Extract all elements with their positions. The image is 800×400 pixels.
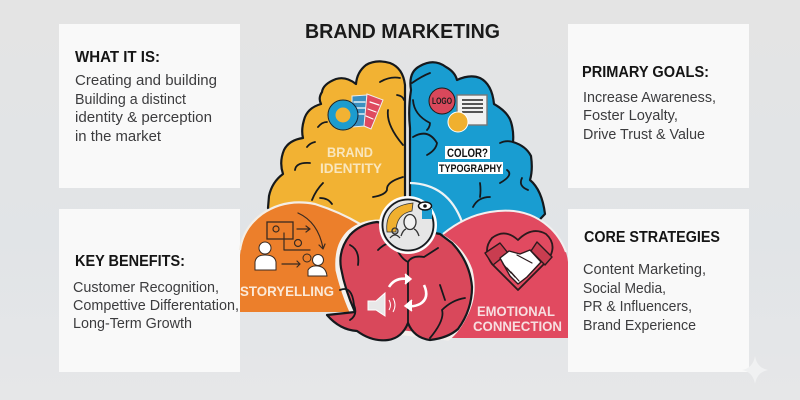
icon: cycle arrows (389, 274, 426, 311)
red brain: storytelling and emotion (327, 222, 472, 340)
icon: logo and document: LOGO (432, 96, 452, 106)
panel: core strategies (568, 209, 749, 372)
panel: key benefits (59, 209, 240, 372)
icon: person (390, 214, 419, 238)
title: BRAND MARKETING (305, 21, 500, 43)
text: core strategies body: Social Media, (583, 280, 666, 297)
icon: yellow orbit (387, 203, 413, 232)
brain folds (295, 78, 404, 204)
heading: core strategies: CORE STRATEGIES (584, 229, 720, 246)
text: key benefits body (73, 279, 239, 332)
label: emotional connection: EMOTIONAL (477, 303, 555, 319)
brain folds (412, 73, 528, 207)
blue brain: colour and typography (409, 62, 545, 250)
heading: primary goals: PRIMARY GOALS: (582, 64, 709, 81)
icon: sparkle watermark (742, 356, 768, 384)
orange panel: storytelling (240, 202, 360, 312)
text: key benefits body: Long-Term Growth (73, 315, 192, 332)
label: emotional connection (473, 303, 562, 334)
label: brand identity: IDENTITY (320, 160, 383, 176)
label: brand identity (320, 144, 383, 176)
panel: what it is (59, 24, 240, 188)
text: what it is body: Creating and building (75, 72, 217, 89)
heading: key benefits: KEY BENEFITS: (75, 253, 185, 270)
text: core strategies body: Content Marketing, (583, 261, 706, 278)
icon: story flow (255, 213, 327, 276)
icon: color wheel and swatches (328, 94, 383, 130)
label: emotional connection: CONNECTION (473, 318, 562, 334)
white arc behind centre circle (410, 183, 462, 222)
panel: primary goals (568, 24, 749, 188)
text: key benefits body: Compettive Differentation, (73, 297, 239, 314)
red panel: emotional connection (443, 211, 568, 338)
icon: heart and handshake (485, 231, 553, 290)
icon: speaker (368, 293, 395, 316)
icon: eye marker (418, 202, 432, 219)
label: brand identity: BRAND (327, 144, 373, 160)
brain folds (340, 243, 465, 338)
centre circle: brand persona (380, 197, 436, 253)
text: what it is body: identity & perception (75, 109, 212, 126)
label: color and typography (438, 146, 503, 175)
text: core strategies body: PR & Influencers, (583, 298, 692, 315)
text: what it is body (75, 72, 217, 145)
text: primary goals body: Foster Loyalty, (583, 107, 678, 124)
text: primary goals body: Increase Awareness, (583, 89, 716, 106)
yellow brain: brand identity (268, 61, 405, 250)
label: storytelling: STORYELLING (240, 283, 334, 299)
icon: logo and document (429, 88, 487, 132)
text: primary goals body: Drive Trust & Value (583, 126, 705, 143)
text: core strategies body: Brand Experience (583, 317, 696, 334)
text: primary goals body (583, 89, 716, 143)
text: core strategies body (583, 261, 706, 334)
label: color and typography: TYPOGRAPHY (439, 163, 503, 175)
text: what it is body: in the market (75, 128, 162, 145)
text: key benefits body: Customer Recognition, (73, 279, 219, 296)
heading: what it is: WHAT IT IS: (75, 49, 160, 66)
label: color and typography: COLOR? (447, 146, 488, 160)
text: what it is body: Building a distinct (75, 91, 187, 108)
